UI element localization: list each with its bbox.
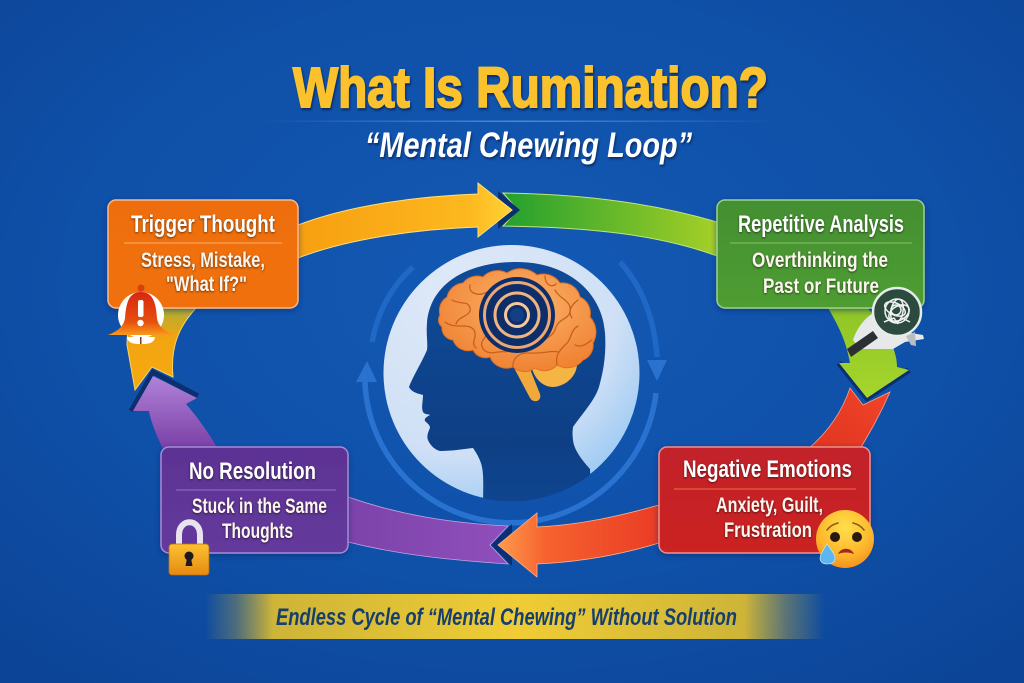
panel: negative emotions: Frustration (724, 519, 812, 542)
panel: negative emotions (659, 447, 870, 553)
panel: no resolution (161, 447, 348, 553)
arrow: emotions to no resolution (498, 505, 659, 577)
panel: negative emotions: Anxiety, Guilt, (716, 494, 823, 517)
panel: repetitive analysis: Past or Future (763, 275, 879, 298)
panel: no resolution: No Resolution (189, 458, 316, 485)
icon: crying face (816, 510, 874, 568)
banner: endless cycle: Endless Cycle of “Mental Chewing” Without Solution (276, 604, 737, 631)
brain (439, 269, 596, 372)
panel: repetitive analysis: Repetitive Analysis (738, 211, 904, 238)
title: What Is Rumination? (293, 56, 768, 120)
panel: no resolution: Thoughts (222, 520, 293, 543)
spiral target rings (479, 277, 555, 353)
banner: endless cycle (205, 594, 825, 639)
panel: trigger thought: "What If?" (166, 273, 247, 296)
arrow: green down from analysis (827, 306, 909, 398)
white disc (384, 245, 640, 501)
panel: repetitive analysis: Overthinking the (752, 249, 888, 272)
arrow tip outline navy lower (491, 524, 512, 566)
arrow: trigger to analysis (298, 183, 512, 258)
arrow: orange lower tail into trigger box (127, 305, 197, 390)
subtitle: “Mental Chewing Loop” (365, 126, 692, 165)
arrow: no resolution tail (348, 497, 508, 564)
panel: trigger thought (108, 200, 298, 308)
arrow tip outline navy (498, 191, 520, 229)
arrow: purple up to trigger (131, 372, 218, 449)
icon: magnifier with tangled thoughts (847, 288, 924, 357)
arrow: analysis segment top (503, 193, 717, 256)
panel: negative emotions: Negative Emotions (683, 456, 852, 483)
head silhouette (409, 262, 605, 520)
panel: repetitive analysis (717, 200, 924, 308)
panel: trigger thought: Trigger Thought (131, 211, 275, 238)
icon: alarm bell (108, 284, 174, 344)
circular loop arrows (356, 262, 667, 523)
panel: trigger thought: Stress, Mistake, (141, 249, 265, 272)
central head and brain illustration (356, 245, 667, 523)
panel: no resolution: Stuck in the Same (192, 495, 327, 518)
brain cerebellum and stem (512, 362, 577, 401)
icon: padlock (169, 522, 209, 575)
arrow: red from analysis to emotions (808, 388, 890, 449)
